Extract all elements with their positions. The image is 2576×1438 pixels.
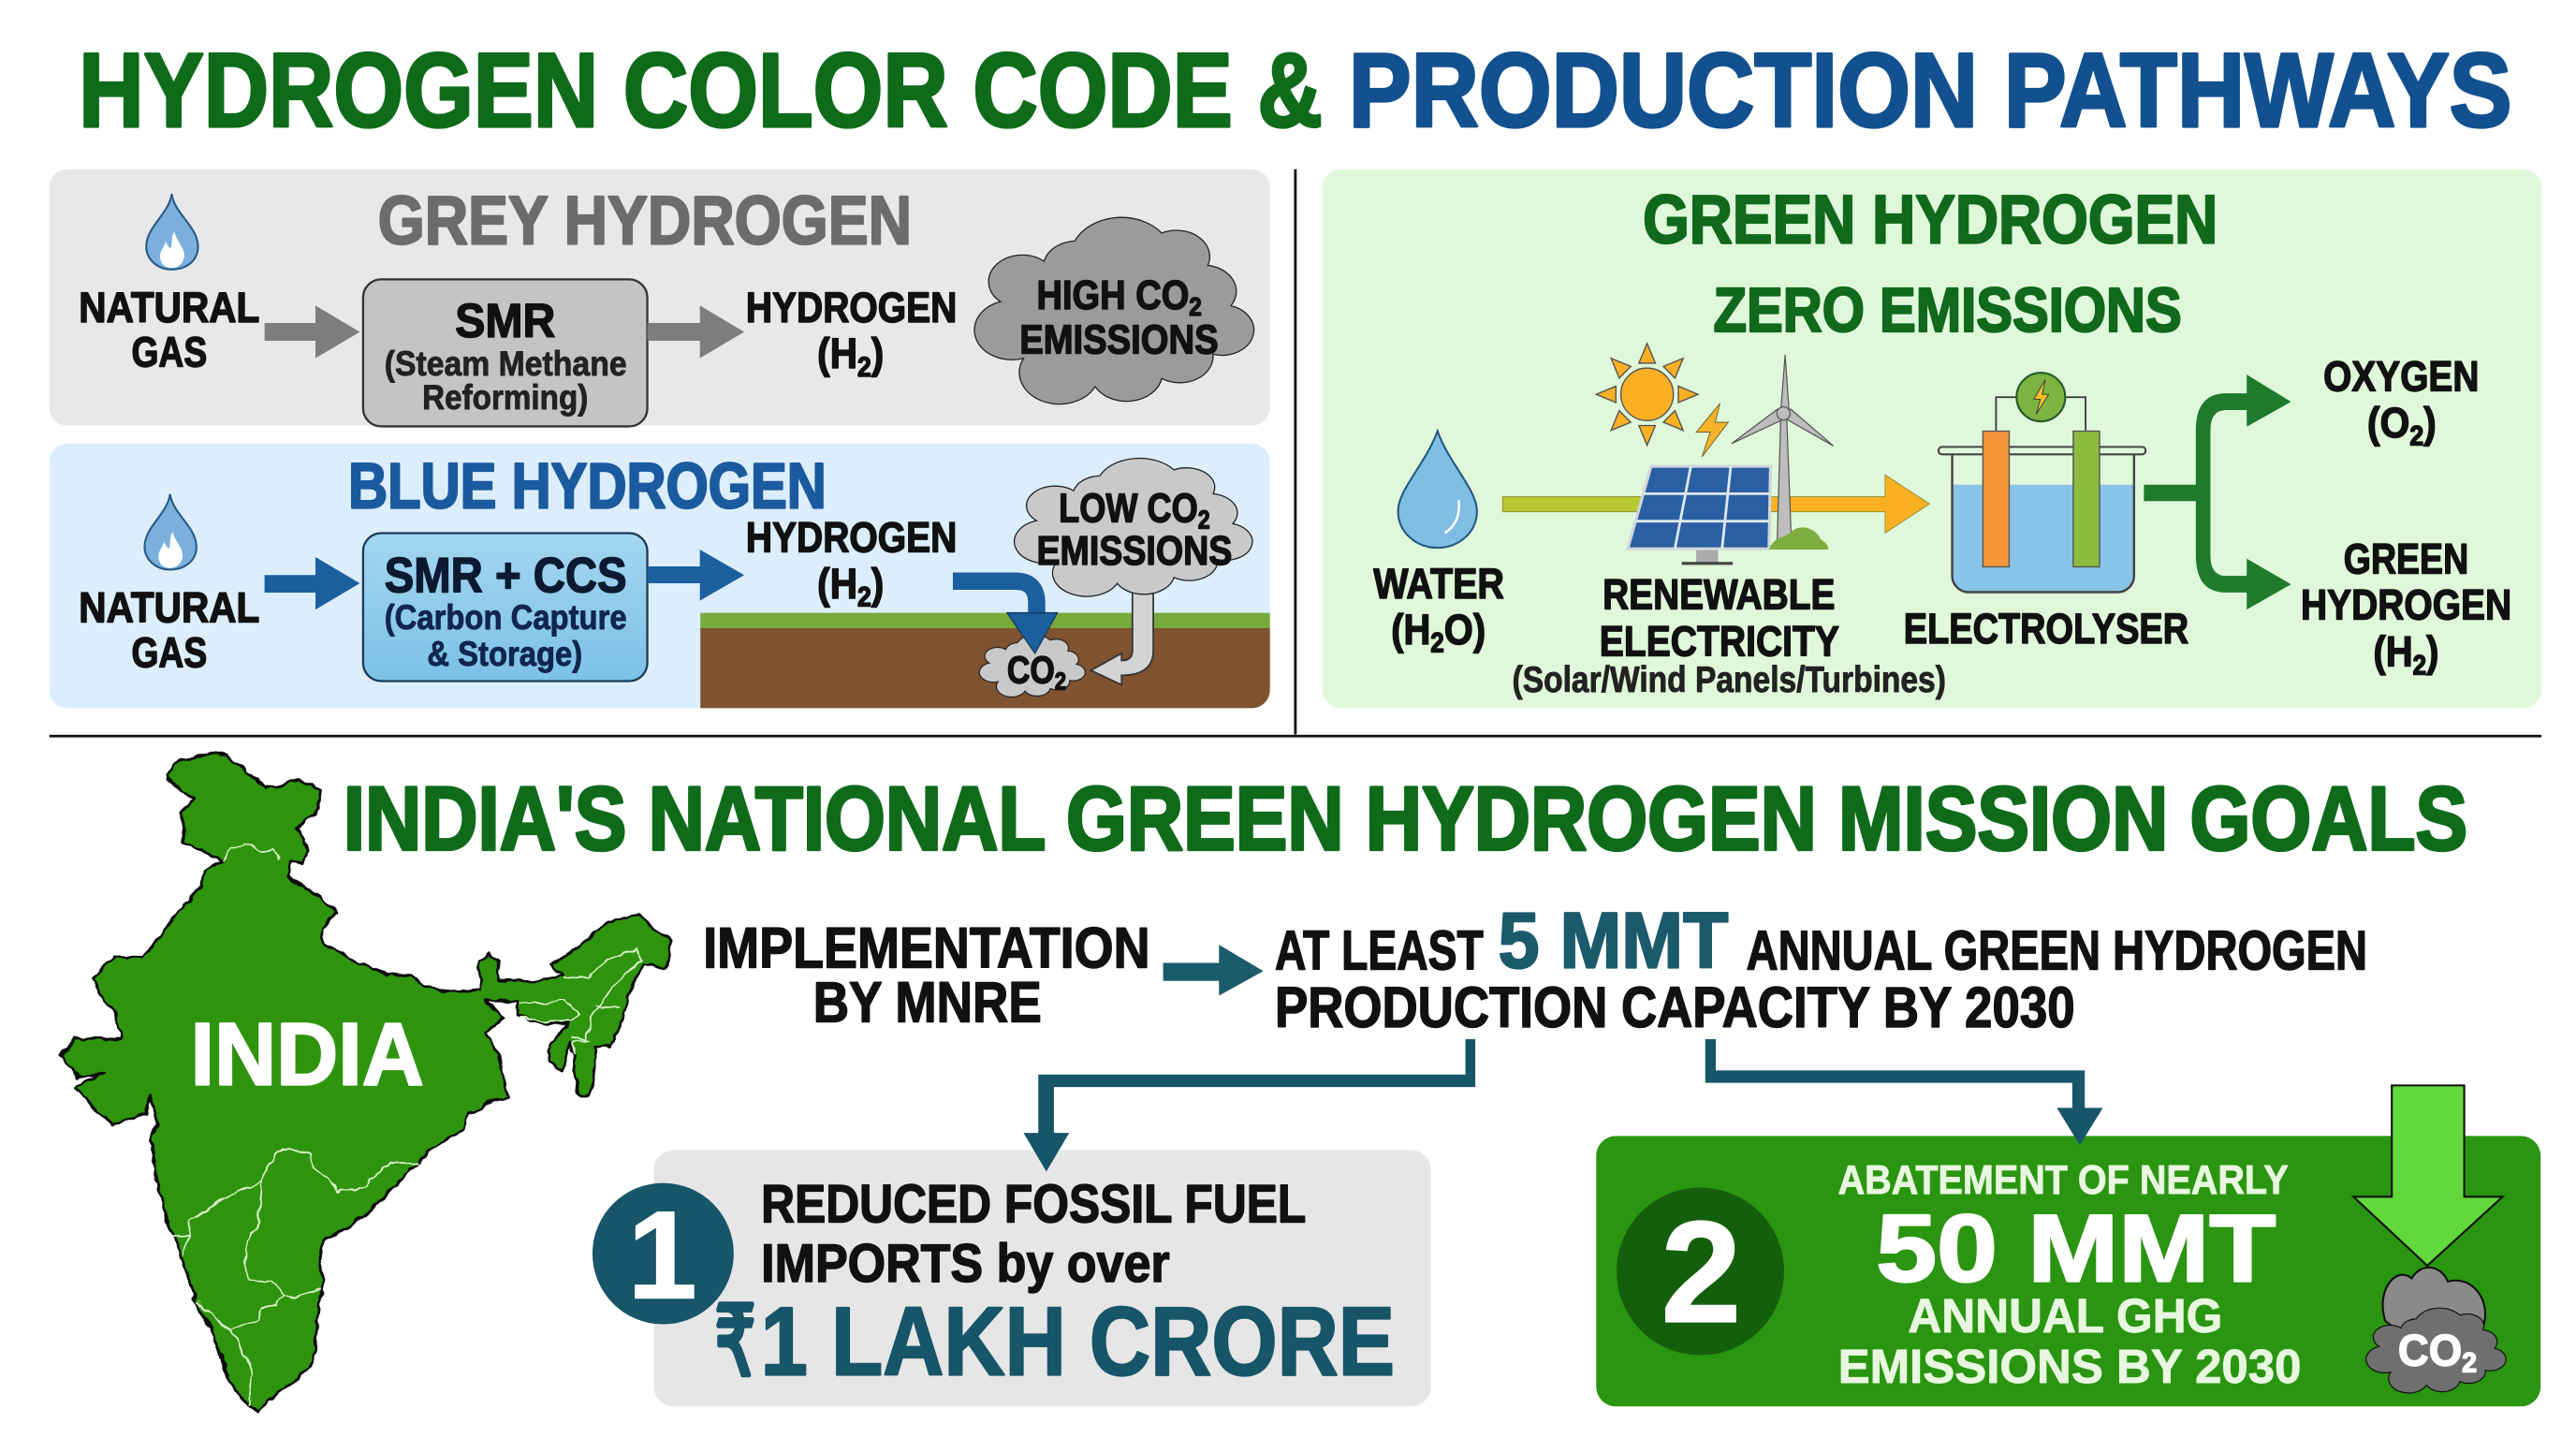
green hydrogen output label: [2301, 536, 2511, 681]
hydrogen label: ): [871, 330, 884, 377]
goal 2 card: GHG abatement: [1596, 1085, 2540, 1406]
text: 5 MMT production target: ANNUAL GREEN HYDROGEN: [1747, 918, 2367, 981]
oxygen label: OXYGEN: [2323, 353, 2479, 401]
natural gas label: GAS: [131, 629, 207, 677]
goal 2 text: [1838, 1157, 2302, 1393]
number badge 1: [593, 1183, 734, 1325]
icon: CO2 cloud: 2: [2462, 1347, 2477, 1378]
hydrogen label: (H: [817, 330, 862, 377]
text: implementation by MNRE: [703, 917, 1150, 1035]
water label: [1373, 560, 1504, 659]
SMR + CCS box: & Storage): [427, 635, 582, 673]
icon: natural gas flame: [145, 494, 197, 569]
map label: INDIA: INDIA: [191, 1005, 424, 1104]
title: [79, 31, 2511, 149]
water label: 2: [1430, 628, 1444, 659]
natural gas label: [79, 284, 259, 375]
SMR + CCS box: [363, 534, 648, 681]
low CO2 emissions cloud: [1015, 458, 1252, 596]
hydrogen label: [746, 514, 957, 613]
hydrogen label: 2: [857, 352, 871, 383]
hydrogen label: HYDROGEN: [746, 284, 957, 331]
SMR + CCS box: (Carbon Capture: [385, 598, 627, 637]
oxygen label: (O: [2367, 399, 2415, 447]
grey hydrogen heading: GREY HYDROGEN: [378, 182, 912, 259]
goal 1 text: REDUCED FOSSIL FUEL: [761, 1175, 1306, 1235]
arrow: SMR+CCS to hydrogen: [648, 550, 744, 601]
oxygen label: 2: [2409, 421, 2423, 452]
arrow: residual CO2 to storage: [1090, 588, 1153, 684]
stored CO2 cloud: 2: [1055, 667, 1066, 695]
high CO2 emissions cloud: EMISSIONS: [1019, 316, 1219, 362]
SMR + CCS box: SMR + CCS: [385, 549, 627, 604]
renewable electricity label: ELECTRICITY: [1600, 617, 1839, 665]
SMR box: [363, 279, 648, 426]
icon: wind turbine: [1732, 355, 1834, 546]
green hydrogen output label: HYDROGEN: [2301, 581, 2511, 629]
renewable electricity label: RENEWABLE: [1603, 570, 1835, 618]
natural gas label: NATURAL: [79, 583, 259, 631]
electrolyser label: ELECTROLYSER: [1904, 605, 2188, 653]
low CO2 emissions cloud: 2: [1198, 505, 1210, 534]
arrow: MNRE to target: [1164, 945, 1264, 996]
goal 2 text: EMISSIONS BY 2030: [1838, 1340, 2302, 1393]
oxygen label: ): [2423, 399, 2437, 447]
icon: electrolyser beaker: [1939, 373, 2145, 593]
hydrogen label: (H: [817, 560, 862, 608]
icon: CO2 cloud: [2366, 1268, 2506, 1393]
panel: grey hydrogen: [50, 169, 1270, 426]
low CO2 emissions cloud: LOW CO: [1059, 485, 1227, 531]
text: 5 MMT production target: AT LEAST: [1275, 918, 1484, 981]
SMR box: Reforming): [422, 378, 588, 417]
hydrogen label: [746, 284, 957, 383]
stored CO2 cloud: [979, 635, 1085, 697]
icon: CO2 cloud: CO: [2398, 1326, 2465, 1375]
arrow: gas to SMR+CCS: [265, 557, 359, 609]
underground ground strata: [700, 613, 1270, 708]
natural gas label: GAS: [131, 328, 207, 375]
goal 1 value: ₹: [714, 1287, 755, 1396]
zero emissions subheading: ZERO EMISSIONS: [1714, 276, 2182, 345]
number badge 2: 2: [1661, 1191, 1741, 1353]
goal 1 text: [761, 1175, 1306, 1294]
icon: hill: [1769, 527, 1828, 550]
renewable electricity label: (Solar/Wind Panels/Turbines): [1513, 660, 1946, 700]
arrow: SMR to hydrogen: [648, 305, 744, 359]
water label: WATER: [1373, 560, 1504, 608]
number badge 2: [1617, 1188, 1784, 1356]
hydrogen label: ): [871, 560, 884, 608]
water label: (H: [1391, 606, 1436, 653]
arrow: water through renewables to electrolyser: [1502, 475, 1929, 533]
arrow: gas to SMR: [265, 305, 359, 359]
arrow: capture into storage: [953, 581, 1057, 653]
panel: blue hydrogen: [50, 444, 1270, 708]
goal 2 text: 50 MMT: [1876, 1196, 2276, 1302]
text: implementation by MNRE: BY MNRE: [813, 971, 1042, 1035]
arrows: electrolyser outputs: [2144, 374, 2291, 609]
arrow: connector to goal 2: [1705, 1039, 2102, 1145]
arrow: connector to goal 1: [1023, 1039, 1475, 1171]
icon: lightning bolt: [1696, 404, 1728, 457]
SMR box: SMR: [455, 294, 555, 347]
map: India: [61, 754, 671, 1412]
text: 5 MMT production target: 5 MMT: [1499, 897, 1728, 985]
goal 2 text: ABATEMENT OF NEARLY: [1838, 1157, 2289, 1203]
low CO2 emissions cloud: EMISSIONS: [1036, 528, 1232, 574]
stored CO2 cloud: CO: [1007, 648, 1063, 691]
natural gas label: NATURAL: [79, 284, 259, 331]
icon: down arrow: [2353, 1085, 2502, 1266]
green hydrogen heading: GREEN HYDROGEN: [1643, 181, 2217, 258]
oxygen label: [2323, 353, 2479, 452]
number badge 1: 1: [627, 1185, 697, 1325]
goal 2 text: ANNUAL GHG: [1908, 1289, 2222, 1343]
text: 5 MMT production target: [1275, 897, 2367, 1040]
renewable electricity label: [1513, 570, 1946, 700]
panel: green hydrogen: [1323, 169, 2541, 708]
icon: natural gas flame: [146, 194, 198, 270]
text: implementation by MNRE: IMPLEMENTATION: [703, 917, 1150, 981]
natural gas label: [79, 583, 259, 677]
goal 1 value: 1 LAKH CRORE: [761, 1287, 1395, 1396]
hydrogen label: 2: [857, 582, 871, 613]
icon: sun: [1596, 344, 1698, 446]
title: HYDROGEN COLOR CODE &: [79, 31, 1323, 149]
high CO2 emissions cloud: HIGH CO: [1036, 272, 1212, 318]
blue hydrogen heading: BLUE HYDROGEN: [348, 449, 827, 521]
high CO2 emissions cloud: 2: [1189, 292, 1202, 321]
high CO2 emissions cloud: [974, 217, 1254, 404]
green hydrogen output label: 2: [2413, 650, 2426, 681]
green hydrogen output label: (H: [2374, 628, 2419, 676]
goal 1 text: IMPORTS by over: [761, 1234, 1170, 1294]
SMR box: (Steam Methane: [385, 345, 627, 383]
icon: solar panel: [1628, 466, 1770, 565]
text: 5 MMT production target: PRODUCTION CAPACITY BY 2030: [1275, 976, 2075, 1040]
water label: O): [1444, 606, 1486, 653]
icon: water drop: [1398, 432, 1477, 548]
green hydrogen output label: ): [2426, 628, 2438, 676]
goal 1 card: fossil fuel imports: [593, 1151, 1431, 1406]
hydrogen label: HYDROGEN: [746, 514, 957, 562]
green hydrogen output label: GREEN: [2344, 536, 2468, 583]
